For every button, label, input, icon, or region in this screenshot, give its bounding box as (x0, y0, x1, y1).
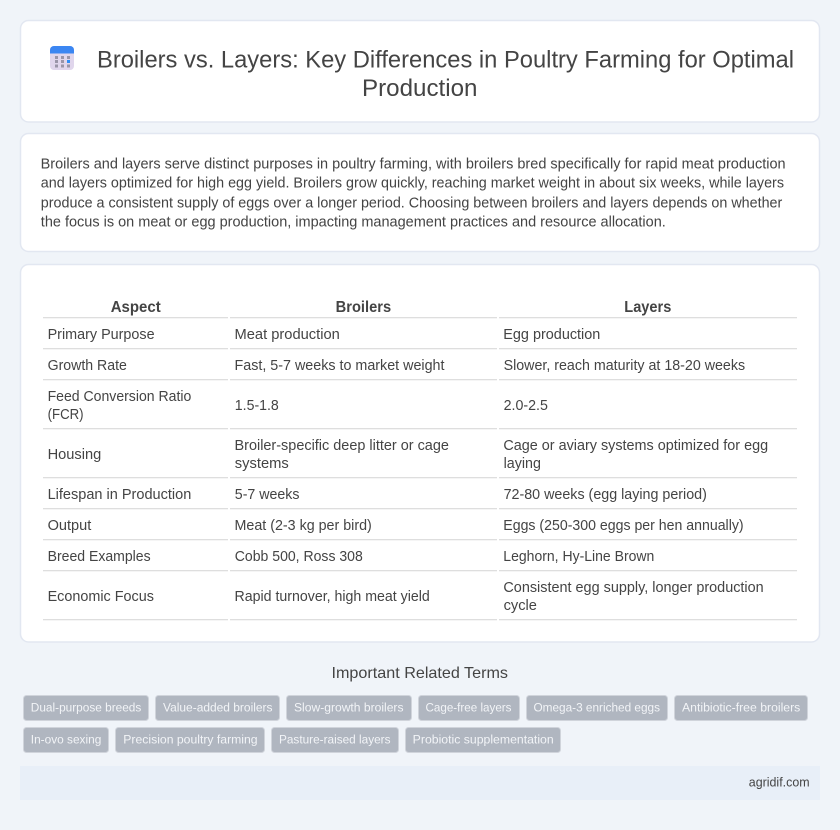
tag: antibiotic-free broilers (674, 696, 808, 720)
table rules (43, 317, 797, 620)
footer source text: agridif.com (749, 775, 810, 790)
row: breed examples: Leghorn, Hy-Line Brown (503, 549, 654, 565)
row: housing: Housing (48, 447, 101, 463)
row: feed conversion ratio: (FCR) (48, 407, 84, 423)
row: housing (48, 438, 768, 472)
row: primary purpose: Primary Purpose (48, 327, 155, 343)
tag: slow-growth broilers (286, 696, 412, 720)
tag: probiotic supplementation: Probiotic supplementation (413, 733, 554, 747)
row: housing: Cage or aviary systems optimized for egg (503, 438, 768, 454)
text block: introduction paragraph: and layers optimized for high egg yield. Broilers grow quickly, reaching market weight in about six weeks, while layers (41, 176, 784, 192)
row: output: Meat (2-3 kg per bird) (234, 518, 372, 534)
tag: cage-free layers: Cage-free layers (426, 701, 512, 715)
text block: introduction paragraph: Broilers and layers serve distinct purposes in poultry farming, with broilers bred specifically for rapid meat production (41, 156, 786, 172)
row: primary purpose: Egg production (503, 327, 600, 343)
row: housing: laying (504, 456, 541, 472)
tag: omega-3 enriched eggs: Omega-3 enriched eggs (534, 701, 660, 715)
row: feed conversion ratio: 2.0-2.5 (504, 398, 548, 414)
tag: dual-purpose breeds: Dual-purpose breeds (31, 701, 141, 715)
panel: related term tags (24, 696, 808, 752)
panel: comparison table (20, 264, 820, 642)
tag: slow-growth broilers: Slow-growth broilers (294, 701, 404, 715)
tag: precision poultry farming (116, 728, 264, 752)
row: primary purpose (48, 327, 600, 343)
heading: important related terms: Important Related Terms (332, 665, 508, 682)
title (97, 46, 794, 102)
row: housing: systems (235, 456, 289, 472)
tag: dual-purpose breeds (24, 696, 148, 720)
row: primary purpose: Meat production (234, 327, 340, 343)
table header row: Aspect (111, 299, 161, 316)
panel: introduction (20, 134, 820, 252)
row: lifespan in production (48, 487, 707, 503)
title: Broilers vs. Layers: Key Differences in Poultry Farming for Optimal (97, 46, 794, 73)
tag: in-ovo sexing: In-ovo sexing (31, 733, 101, 747)
tag: omega-3 enriched eggs (526, 696, 668, 720)
icon: calendar (50, 46, 74, 70)
table header row: Layers (624, 299, 671, 316)
tag: antibiotic-free broilers: Antibiotic-free broilers (682, 701, 800, 715)
row: breed examples (48, 549, 654, 565)
row: output: Output (48, 518, 91, 534)
tag: cage-free layers (418, 696, 520, 720)
tag: probiotic supplementation (406, 728, 560, 752)
row: economic focus: Consistent egg supply, longer production (503, 580, 764, 596)
row: breed examples: Cobb 500, Ross 308 (235, 549, 363, 565)
row: housing: Broiler-specific deep litter or cage (234, 438, 449, 454)
panel: header (20, 20, 820, 122)
row: growth rate: Slower, reach maturity at 18-20 weeks (504, 358, 745, 374)
row: output: Eggs (250-300 eggs per hen annually) (503, 518, 744, 534)
row: lifespan in production: Lifespan in Production (48, 487, 191, 503)
tag: precision poultry farming: Precision poultry farming (123, 733, 258, 747)
row: economic focus: Rapid turnover, high meat yield (234, 589, 430, 605)
row: economic focus (48, 580, 764, 614)
table header row: Broilers (336, 299, 391, 316)
row: output (48, 518, 744, 534)
row: growth rate (48, 358, 745, 374)
text block: introduction paragraph: produce a consistent supply of eggs over a longer period. Choosing between broilers and layers depends on whether (41, 195, 782, 211)
row: economic focus: Economic Focus (48, 589, 154, 605)
tag: pasture-raised layers: Pasture-raised layers (279, 733, 390, 747)
table header row (111, 299, 671, 316)
row: feed conversion ratio (48, 389, 548, 423)
tag: pasture-raised layers (272, 728, 398, 752)
row: breed examples: Breed Examples (48, 549, 151, 565)
row: growth rate: Growth Rate (48, 358, 127, 374)
row: lifespan in production: 5-7 weeks (235, 487, 300, 503)
row: feed conversion ratio: 1.5-1.8 (235, 398, 279, 414)
tag: value-added broilers (156, 696, 280, 720)
row: growth rate: Fast, 5-7 weeks to market weight (234, 358, 444, 374)
row: feed conversion ratio: Feed Conversion Ratio (48, 389, 191, 405)
text block: introduction paragraph: the focus is on meat or egg production, impacting management practices and resource allocation. (41, 215, 666, 231)
tag: value-added broilers: Value-added broilers (163, 701, 272, 715)
footer (20, 766, 820, 800)
row: lifespan in production: 72-80 weeks (egg laying period) (504, 487, 707, 503)
tag: in-ovo sexing (24, 728, 108, 752)
row: economic focus: cycle (504, 598, 537, 614)
title: Production (362, 75, 478, 102)
text block: introduction paragraph (41, 156, 786, 231)
